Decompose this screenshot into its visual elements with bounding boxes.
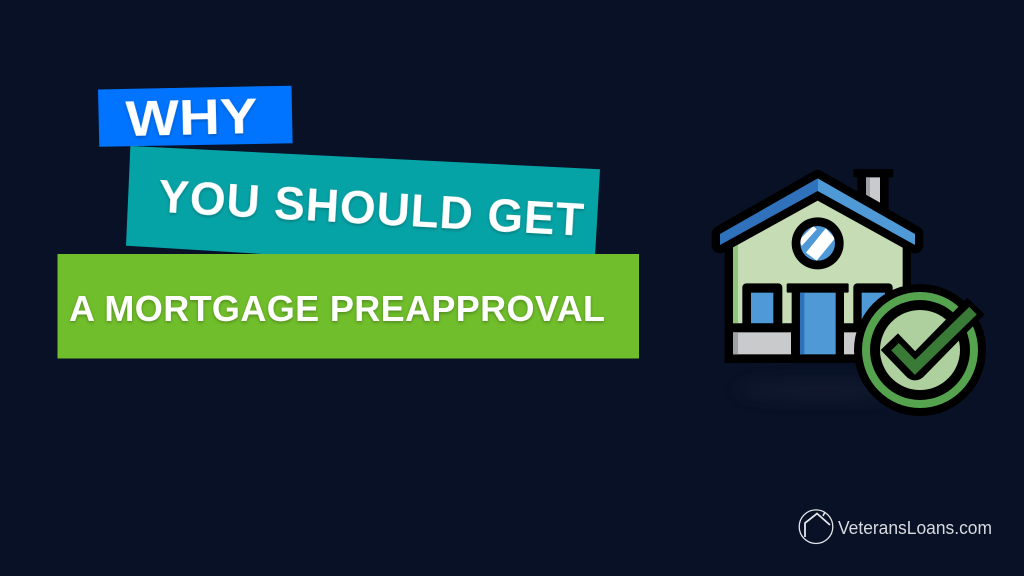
heading: you should get — [126, 146, 600, 274]
teal banner — [126, 146, 600, 274]
porch — [725, 323, 911, 354]
right window — [853, 283, 893, 327]
house body — [725, 193, 911, 363]
logo: VeteransLoans.com — [799, 510, 992, 544]
heading: why — [98, 86, 293, 147]
roof — [720, 178, 915, 245]
green banner — [58, 254, 639, 358]
infographic canvas — [58, 86, 991, 544]
logo mark — [799, 510, 833, 544]
left window — [742, 283, 782, 327]
icon: house with check badge — [720, 169, 986, 416]
blue banner — [98, 86, 293, 147]
ground shadow — [737, 380, 910, 400]
round window — [792, 217, 844, 269]
door — [787, 283, 849, 357]
heading: a mortgage preapproval — [58, 254, 639, 358]
heading text: you should get: YOU SHOULD GET — [157, 170, 585, 246]
chimney — [853, 169, 893, 210]
heading text: a mortgage preapproval: A MORTGAGE PREAPPROVAL — [69, 288, 605, 329]
check badge — [854, 284, 986, 416]
heading text: why: WHY — [125, 88, 258, 147]
logo text: VeteransLoans.com — [838, 518, 992, 538]
